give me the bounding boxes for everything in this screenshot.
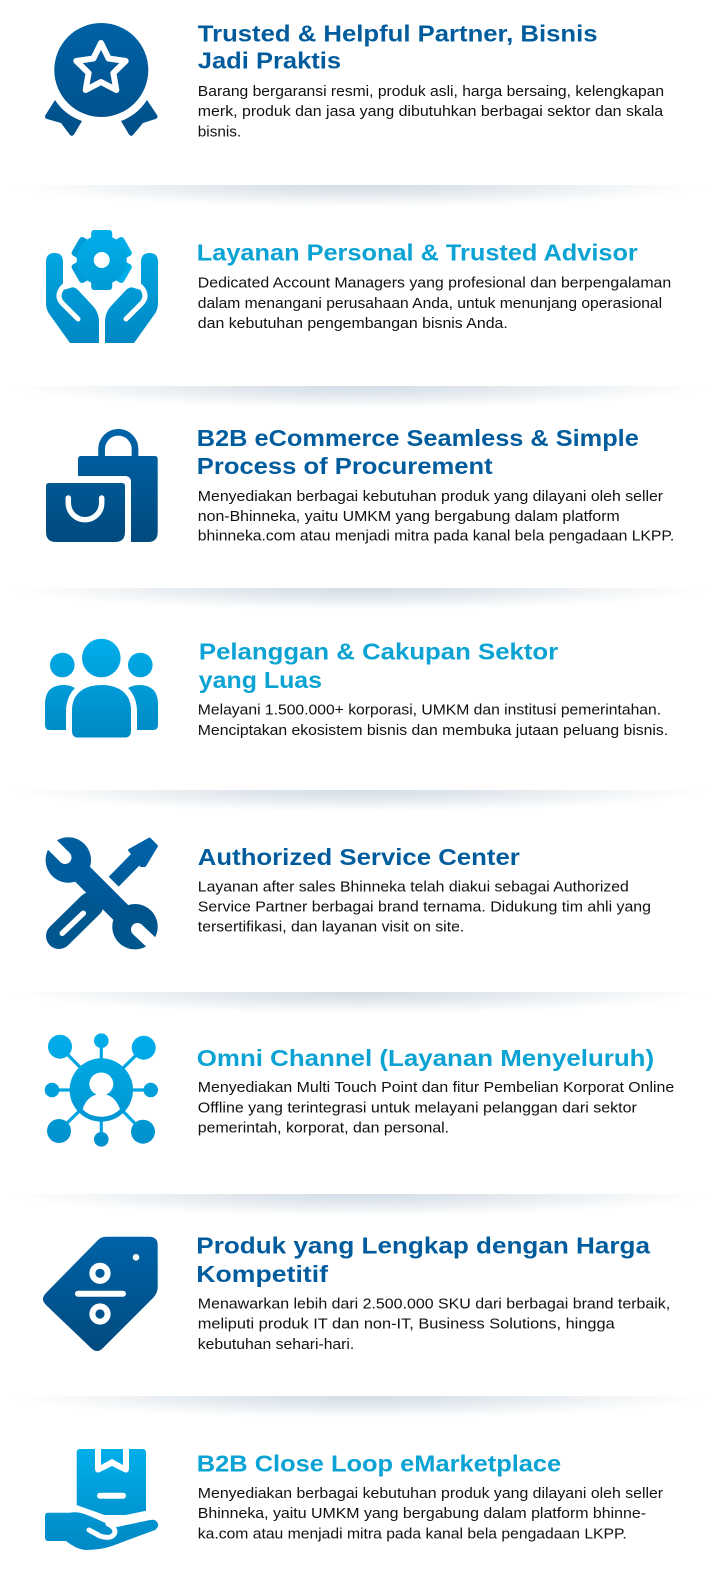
- heading: Produk yang Lengkap dengan Harga: [196, 1233, 651, 1259]
- panel: Layanan Personal & Trusted Advisor: [46, 230, 671, 343]
- panel: B2B Close Loop eMarketplace: [40, 1449, 663, 1550]
- panel: Authorized Service Center: [46, 837, 651, 949]
- heading: B2B eCommerce Seamless & Simple: [197, 425, 639, 451]
- panel: B2B eCommerce: [40, 425, 674, 544]
- body text: merk, produk dan jasa yang dibutuhkan berbagai sektor dan skala: [198, 103, 664, 120]
- heading: Jadi Praktis: [198, 48, 341, 74]
- body text: [198, 1485, 663, 1542]
- body text: Menyediakan Multi Touch Point dan fitur Pembelian Korporat Online: [198, 1079, 674, 1096]
- body text: [198, 1079, 674, 1136]
- icon: price tag with percent: [43, 1237, 158, 1351]
- body text: [198, 83, 664, 140]
- heading: [196, 1233, 651, 1287]
- body text: Menawarkan lebih dari 2.500.000 SKU dari berbagai brand terbaik,: [198, 1296, 670, 1312]
- heading: Trusted & Helpful Partner, Bisnis: [198, 20, 598, 46]
- body text: Offline yang terintegrasi untuk melayani pelanggan dari sektor: [198, 1099, 637, 1116]
- heading: B2B Close Loop eMarketplace: [197, 1451, 561, 1477]
- heading: Omni Channel (Layanan Menyeluruh): [197, 1045, 654, 1071]
- body text: bisnis.: [198, 123, 241, 140]
- body text: tersertifikasi, dan layanan visit on site.: [198, 919, 464, 936]
- panel: Pelanggan & Cakupan Sektor: [45, 638, 668, 739]
- body text: Dedicated Account Managers yang profesional dan berpengalaman: [198, 275, 671, 292]
- heading: [197, 425, 639, 479]
- icon: hands holding gear: [46, 230, 158, 343]
- icon: network with person: [45, 1033, 158, 1147]
- icon: award badge with star: [45, 23, 158, 136]
- body text: Menyediakan berbagai kebutuhan produk yang dilayani oleh seller: [198, 488, 663, 505]
- body text: [198, 1296, 670, 1353]
- body text: [198, 275, 671, 332]
- body text: Barang bergaransi resmi, produk asli, harga bersaing, kelengkapan: [198, 83, 664, 100]
- body text: dan kebutuhan pengembangan bisnis Anda.: [198, 315, 508, 332]
- body text: Layanan after sales Bhinneka telah diakui sebagai Authorized: [198, 878, 629, 895]
- body text: meliputi produk IT dan non-IT, Business Solutions, hingga: [198, 1316, 615, 1333]
- body text: pemerintah, korporat, dan personal.: [198, 1120, 449, 1136]
- body text: [198, 702, 668, 739]
- body text: ka.com atau menjadi mitra pada kanal bela pengadaan LKPP.: [198, 1525, 627, 1542]
- heading: Layanan Personal & Trusted Advisor: [197, 239, 638, 265]
- icon: shopping bags: [40, 432, 158, 543]
- panel: Trusted & Helpful Partner: [45, 20, 664, 140]
- body text: [198, 878, 651, 936]
- body text: Bhinneka, yaitu UMKM yang bergabung dalam platform bhinne-: [198, 1505, 646, 1522]
- heading: Pelanggan & Cakupan Sektor: [199, 638, 558, 664]
- body text: kebutuhan sehari-hari.: [198, 1336, 354, 1353]
- heading: [198, 20, 598, 74]
- body text: Menyediakan berbagai kebutuhan produk yang dilayani oleh seller: [198, 1485, 663, 1502]
- heading: Authorized Service Center: [198, 844, 520, 870]
- body text: Service Partner berbagai brand ternama. Didukung tim ahli yang: [198, 898, 651, 916]
- heading: yang Luas: [199, 667, 322, 693]
- body text: non-Bhinneka, yaitu UMKM yang bergabung dalam platform: [198, 508, 620, 525]
- panel: Produk yang Lengkap: [43, 1233, 670, 1353]
- icon: wrench and screwdriver: [46, 837, 158, 949]
- body text: [198, 488, 674, 544]
- body text: dalam menangani perusahaan Anda, untuk menunjang operasional: [198, 295, 662, 312]
- heading: Process of Procurement: [197, 453, 493, 479]
- heading: Kompetitif: [196, 1261, 328, 1287]
- body text: bhinneka.com atau menjadi mitra pada kanal bela pengadaan LKPP.: [198, 528, 674, 544]
- panel: Omni Channel: [45, 1033, 674, 1147]
- body text: Melayani 1.500.000+ korporasi, UMKM dan institusi pemerintahan.: [198, 702, 661, 719]
- icon: hand holding package: [40, 1449, 160, 1550]
- body text: Menciptakan ekosistem bisnis dan membuka jutaan peluang bisnis.: [198, 722, 668, 739]
- heading: [199, 638, 558, 693]
- icon: group of people: [45, 639, 158, 738]
